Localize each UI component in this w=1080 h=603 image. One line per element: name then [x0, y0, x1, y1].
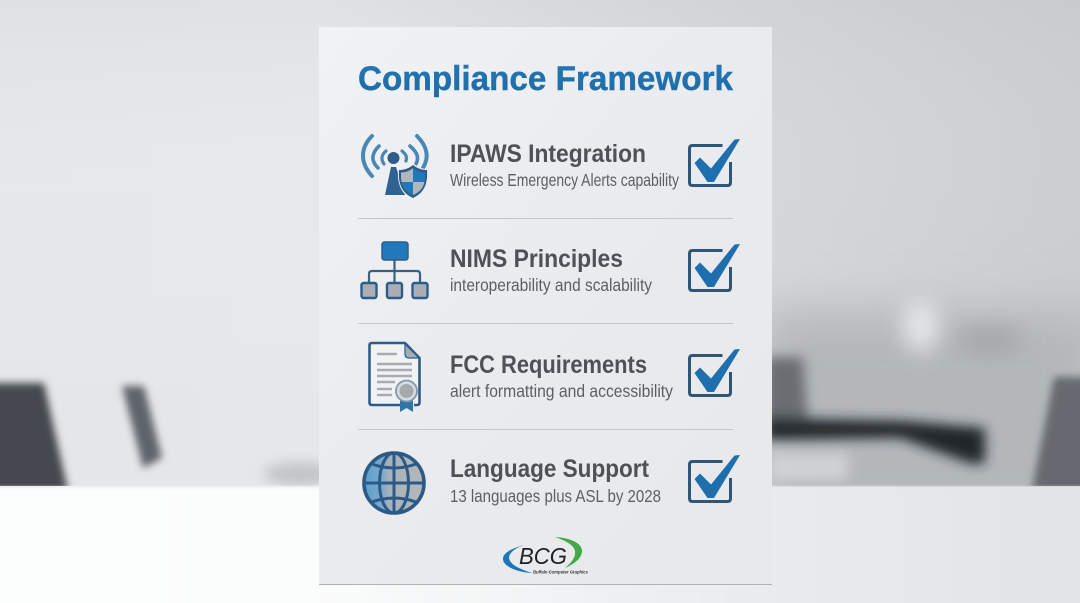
icon: certificate document — [370, 343, 420, 412]
card — [319, 27, 772, 585]
title: Compliance Framework — [358, 60, 733, 98]
logo: BCG — [503, 537, 588, 574]
logo: BCG: BCG — [519, 543, 567, 569]
logo: BCG: Buffalo Computer Graphics — [533, 570, 588, 574]
blurred low shape left — [264, 462, 336, 486]
row: FCC Requirements — [370, 343, 740, 412]
description: interoperability and scalability — [450, 275, 652, 295]
icon: checkbox — [690, 244, 740, 290]
table surface — [0, 487, 1080, 603]
blurred dark patch — [962, 322, 1018, 354]
blurred wall shade right — [772, 295, 1080, 486]
description: alert formatting and accessibility — [450, 381, 673, 401]
icon: antenna and shield — [363, 136, 428, 200]
divider — [358, 429, 733, 430]
icon: checkbox — [690, 455, 740, 502]
blurred lamp glow — [903, 300, 939, 352]
description: Wireless Emergency Alerts capability — [450, 170, 679, 190]
blurred chair middle — [122, 386, 162, 468]
icon: checkbox — [690, 349, 740, 396]
heading: FCC Requirements — [450, 351, 647, 379]
description: 13 languages plus ASL by 2028 — [450, 486, 661, 506]
blurred chair right — [1030, 377, 1080, 500]
icon: globe — [364, 453, 424, 513]
heading: NIMS Principles — [450, 245, 623, 273]
icon: org chart — [362, 242, 428, 298]
row: IPAWS Integration — [363, 136, 740, 200]
blurred chair left — [0, 383, 70, 500]
icon: checkbox — [690, 139, 740, 186]
divider — [358, 218, 733, 219]
blurred furniture right — [765, 357, 808, 425]
heading: IPAWS Integration — [450, 140, 646, 168]
heading: Language Support — [450, 455, 650, 483]
divider — [358, 323, 733, 324]
row: NIMS Principles — [362, 242, 740, 298]
row: Language Support — [364, 453, 740, 513]
